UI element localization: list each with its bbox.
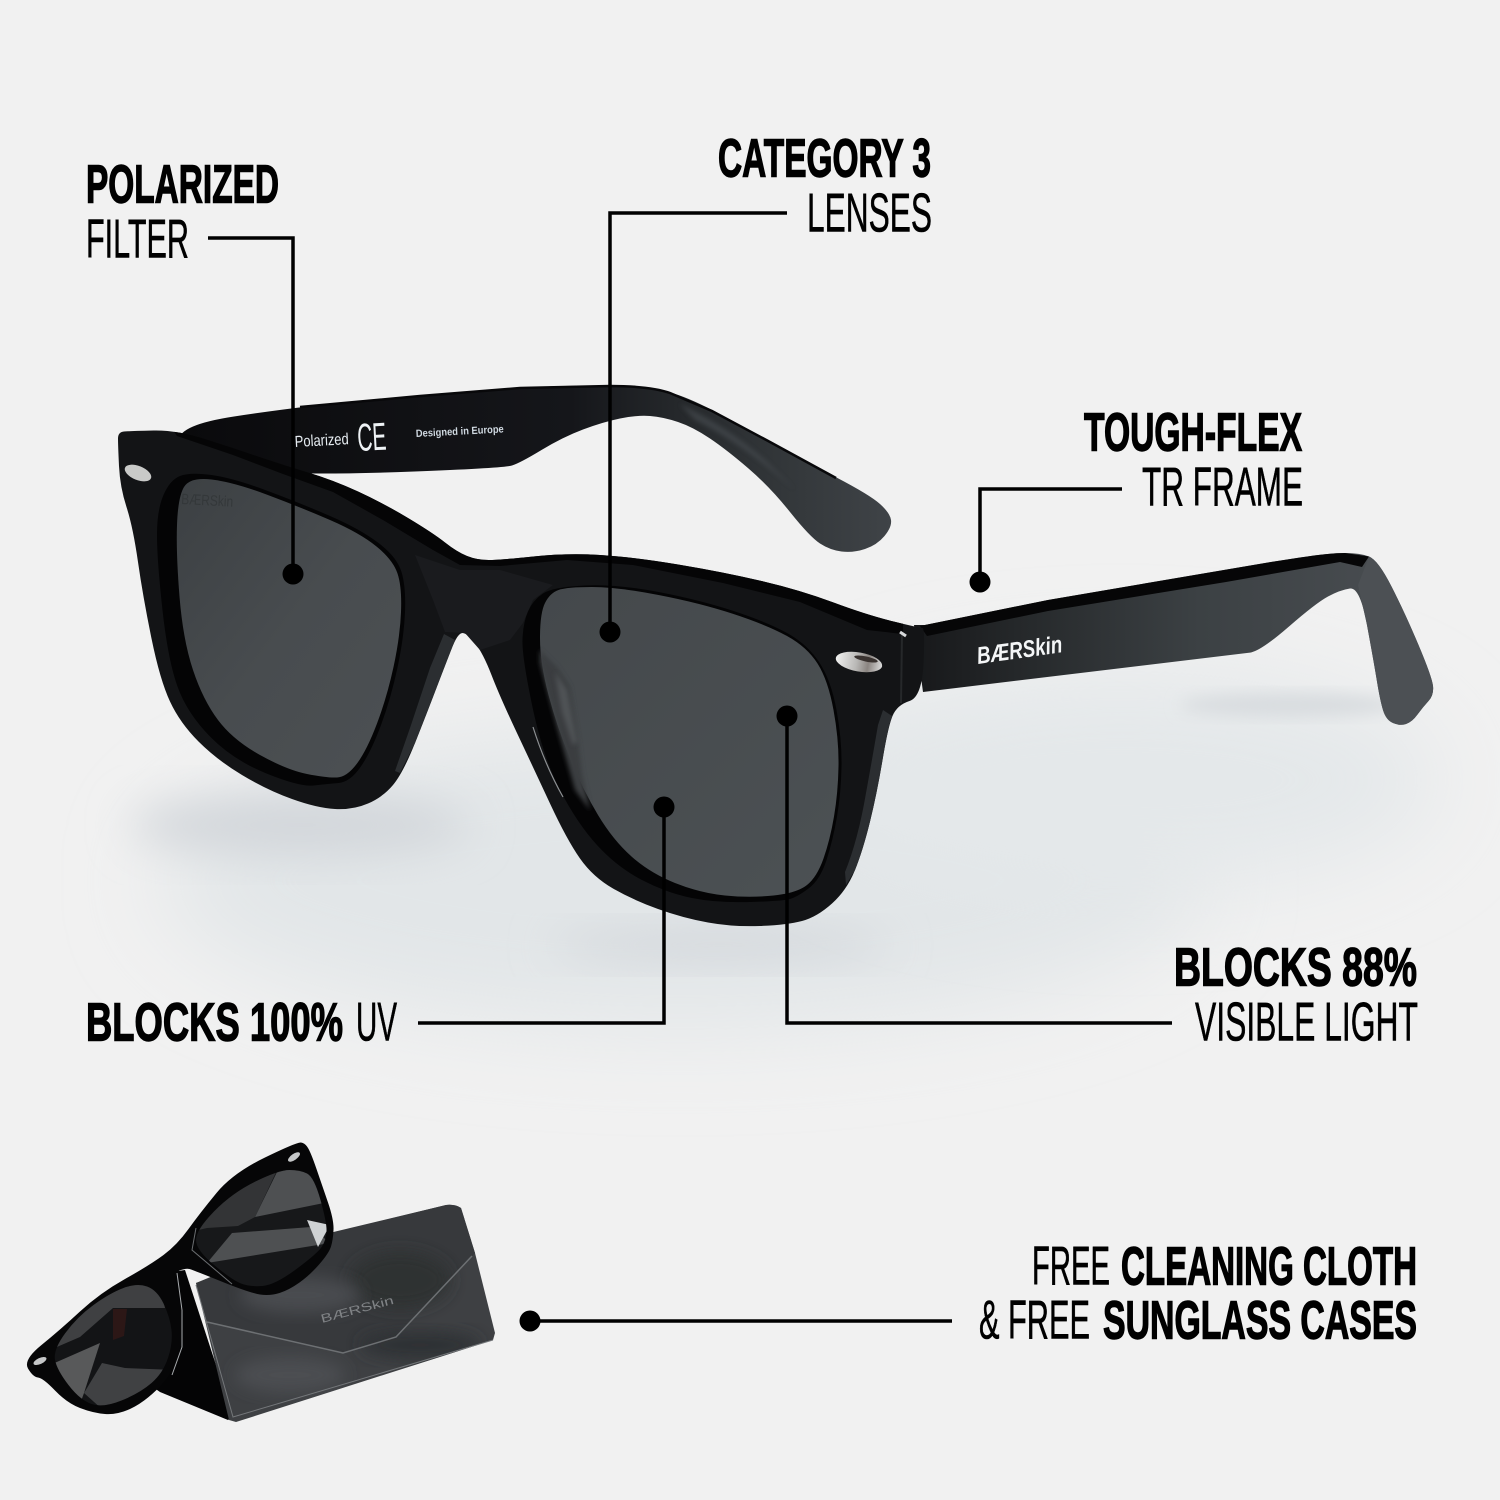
subheading: LENSES bbox=[807, 182, 932, 244]
text line 1 bbox=[1032, 1234, 1417, 1296]
subheading: FILTER bbox=[86, 208, 189, 270]
text: embossed brand on case: BÆRSkin bbox=[319, 1293, 395, 1326]
frame glossy top band bbox=[170, 425, 903, 634]
subheading: UV bbox=[356, 990, 397, 1052]
leader line bbox=[787, 716, 1172, 1023]
leader line bbox=[980, 489, 1122, 582]
text: CE mark on arm: CE bbox=[356, 416, 387, 460]
callout: blocks 88% visible light bbox=[776, 706, 1418, 1052]
leader line bbox=[529, 1319, 952, 1323]
leader line bbox=[208, 238, 293, 574]
callout: blocks 100% UV bbox=[86, 796, 674, 1052]
small photo: sunglasses resting on folding case bbox=[27, 1142, 495, 1422]
text: faint BAERSkin on lens: BÆRSkin bbox=[181, 491, 234, 511]
callout: free cloth and cases bbox=[520, 1234, 1417, 1350]
folding case bbox=[150, 1205, 495, 1422]
frame gloss right bbox=[845, 710, 892, 885]
callout: tough-flex frame bbox=[970, 402, 1303, 592]
dot bbox=[282, 564, 304, 584]
text line 2 bbox=[979, 1288, 1417, 1350]
heading: CATEGORY 3 bbox=[718, 128, 931, 188]
text: Polarized on arm: Polarized bbox=[294, 431, 349, 451]
front frame bbox=[118, 425, 924, 926]
near temple arm bbox=[914, 553, 1433, 725]
small sunglasses bbox=[27, 1142, 334, 1414]
text: Designed in Europe on arm: Designed in Europe bbox=[416, 423, 504, 440]
subheading: TR FRAME bbox=[1142, 456, 1303, 518]
rivet left bbox=[122, 461, 154, 485]
heading: POLARIZED bbox=[86, 154, 279, 214]
right lens bbox=[522, 585, 842, 902]
dot bbox=[600, 622, 620, 642]
rivet right bbox=[834, 649, 884, 675]
dot bbox=[654, 796, 674, 818]
callout: polarized filter bbox=[86, 154, 304, 584]
dot bbox=[776, 706, 798, 726]
small upper lens bbox=[196, 1170, 327, 1286]
heading: BLOCKS 100% bbox=[86, 992, 343, 1052]
leader line bbox=[610, 213, 787, 632]
frame bridge matte area bbox=[415, 555, 553, 650]
leader line bbox=[418, 807, 664, 1023]
frame gloss bridge bbox=[395, 634, 455, 773]
far temple arm bbox=[179, 386, 891, 552]
dot bbox=[520, 1310, 540, 1332]
text: BAERSkin logo on arm: BÆRSkin bbox=[975, 631, 1064, 670]
small lower lens bbox=[55, 1285, 172, 1406]
left lens bbox=[157, 474, 405, 786]
text line 1: FREE bbox=[1032, 1234, 1110, 1296]
main sunglasses photo illustration bbox=[118, 386, 1433, 926]
callout: category 3 lenses bbox=[600, 128, 932, 642]
dot bbox=[970, 572, 990, 592]
text line 2: & FREE bbox=[979, 1288, 1090, 1350]
heading: TOUGH-FLEX bbox=[1084, 402, 1302, 462]
small rivets bbox=[32, 1151, 301, 1367]
